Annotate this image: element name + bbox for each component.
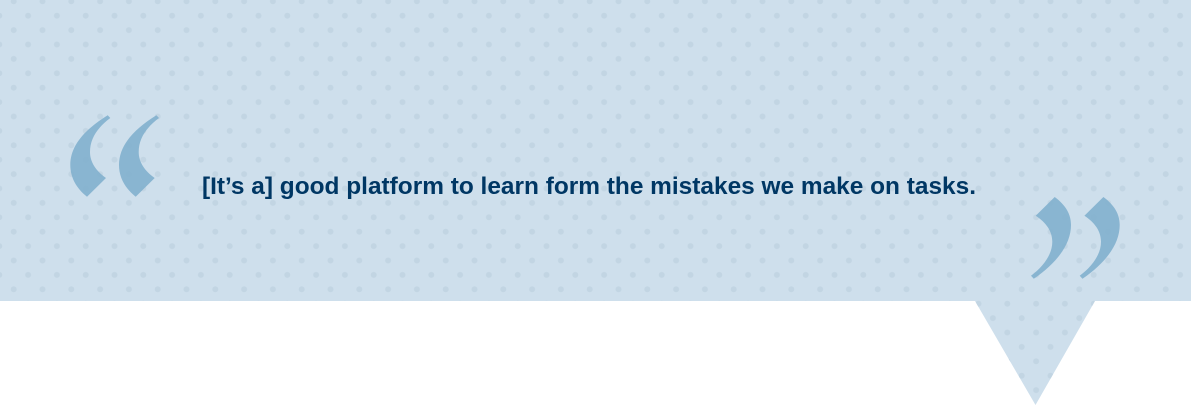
icon: opening quotation mark xyxy=(70,115,159,197)
quote text: [It’s a] good platform to learn form the mistakes we make on tasks. xyxy=(202,173,976,200)
icon: closing quotation mark xyxy=(1031,197,1120,279)
